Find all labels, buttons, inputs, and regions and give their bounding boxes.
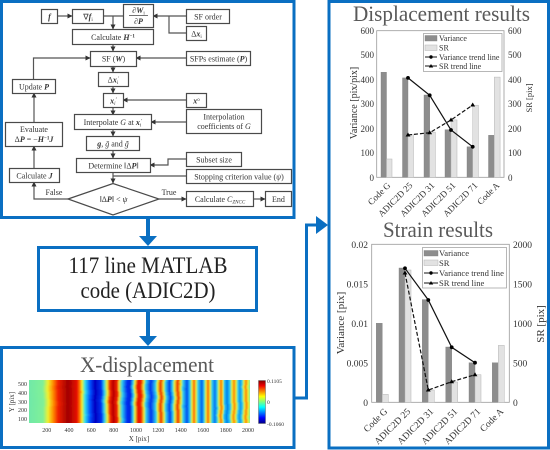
box: x zero: o bbox=[197, 98, 200, 103]
panel: results bbox=[329, 1, 548, 448]
category labels: Code G bbox=[366, 180, 393, 207]
left axis ticks: 0 bbox=[363, 399, 368, 409]
heatmap x ticks: 800 bbox=[109, 428, 118, 434]
right axis ticks: 100 bbox=[508, 148, 522, 158]
box: update P bbox=[12, 80, 56, 94]
box: stopping criterion: Stopping criterion value (ψ) bbox=[194, 172, 284, 182]
left axis ticks: 0 bbox=[370, 173, 374, 183]
right axis ticks bbox=[508, 26, 522, 183]
heatmap x ticks: 600 bbox=[87, 428, 96, 434]
box: gradient f: i bbox=[91, 18, 93, 23]
left axis ticks: 200 bbox=[360, 124, 374, 134]
colorbar bbox=[258, 379, 284, 428]
category labels: ADIC2D 51 bbox=[419, 180, 457, 219]
box: interpolate G bbox=[74, 114, 152, 130]
heading: X-displacement: X-displacement bbox=[80, 352, 214, 377]
heatmap x ticks: 1000 bbox=[130, 428, 142, 434]
box: calculate H inverse bbox=[72, 30, 154, 44]
category labels: ADIC2D 31 bbox=[396, 407, 436, 447]
box: determine norm bbox=[76, 158, 150, 172]
box: dW/dP: ∂W bbox=[132, 6, 143, 15]
flowchart connectors bbox=[34, 16, 265, 199]
left axis ticks bbox=[360, 26, 374, 183]
box: SF order bbox=[186, 10, 230, 24]
right axis ticks: 1000 bbox=[513, 320, 532, 330]
heatmap y ticks: 100 bbox=[18, 417, 27, 423]
box: f bbox=[42, 10, 58, 24]
box: evaluate delta P: −1 bbox=[44, 136, 50, 142]
left axis ticks: 400 bbox=[360, 75, 374, 85]
box: calculate H inverse: Calculate H bbox=[91, 33, 130, 42]
box: calculate J: Calculate J bbox=[16, 172, 54, 180]
box: subset size bbox=[186, 152, 242, 166]
box: determine norm: Determine ‖ΔP‖ bbox=[88, 162, 139, 170]
label: false: False bbox=[46, 188, 63, 197]
heatmap y ticks: 300 bbox=[18, 400, 27, 406]
box: evaluate delta P: J bbox=[48, 135, 54, 144]
box: calculate H inverse: −1 bbox=[130, 34, 135, 40]
trend lines bbox=[403, 266, 477, 392]
box: delta x prime: ′ bbox=[118, 77, 119, 82]
heading: strain results: Strain results bbox=[383, 217, 493, 242]
colorbar: 0 bbox=[267, 400, 270, 406]
heatmap x ticks: 1800 bbox=[220, 428, 232, 434]
category labels: ADIC2D 31 bbox=[398, 180, 436, 219]
box: x prime bbox=[104, 94, 124, 108]
category labels bbox=[362, 407, 506, 447]
heatmap bbox=[29, 380, 250, 423]
box: delta x prime: Δx bbox=[108, 76, 117, 84]
box: g derivatives: g, ḡ and g̃ bbox=[96, 140, 130, 148]
category labels: ADIC2D 25 bbox=[373, 407, 413, 447]
box: interpolate G: ′ bbox=[141, 120, 142, 124]
legend: Variance bbox=[439, 34, 467, 43]
box: SF (W) bbox=[90, 52, 136, 66]
box: delta x prime bbox=[98, 72, 128, 86]
chart: strain bbox=[335, 241, 547, 447]
box: g derivatives bbox=[86, 136, 140, 150]
right axis ticks: 0 bbox=[513, 399, 518, 409]
box: gradient f bbox=[72, 10, 104, 24]
bars bbox=[381, 72, 500, 177]
left axis ticks: 0.02 bbox=[351, 241, 368, 251]
right axis ticks: 2000 bbox=[513, 241, 532, 251]
box: calculate C ZNCC: ZNCC bbox=[232, 200, 246, 206]
heatmap x ticks: 1400 bbox=[175, 428, 187, 434]
box: dW/dP: ∂P bbox=[134, 17, 143, 26]
left axis ticks: 500 bbox=[360, 50, 374, 60]
left axis ticks: 0.015 bbox=[347, 280, 368, 290]
heatmap y ticks bbox=[18, 382, 27, 423]
left axis ticks: 300 bbox=[360, 99, 374, 109]
colorbar: 0.1105 bbox=[267, 379, 282, 385]
box: calculate C ZNCC bbox=[186, 192, 254, 206]
box: interpolate G: i bbox=[140, 124, 142, 128]
y axis label: Y [pix] bbox=[8, 392, 16, 412]
box: delta x prime: i bbox=[117, 81, 119, 86]
box: gradient f: ∇f bbox=[83, 12, 91, 22]
left axis ticks: 100 bbox=[360, 148, 374, 158]
left axis label: Variance [pix] bbox=[335, 292, 347, 354]
panel: flowchart bbox=[2, 2, 294, 218]
heatmap x ticks: 2000 bbox=[242, 428, 254, 434]
legend bbox=[424, 34, 502, 72]
box: interpolation coefficients: coefficients of G bbox=[197, 122, 251, 131]
box: evaluate delta P bbox=[6, 122, 62, 146]
category labels: Code A bbox=[475, 180, 502, 207]
heatmap y ticks: 400 bbox=[18, 391, 27, 397]
right axis ticks: 400 bbox=[508, 75, 522, 85]
legend: SR trend line bbox=[439, 278, 485, 288]
chart: displacement bbox=[349, 26, 534, 219]
heatmap x ticks: 200 bbox=[42, 428, 51, 434]
legend: Variance trend line bbox=[439, 268, 504, 278]
colorbar: -0.1060 bbox=[267, 422, 284, 428]
legend: Variance bbox=[439, 248, 469, 258]
left axis label: Variance [pix/pix] bbox=[349, 67, 360, 139]
category labels: ADIC2D 71 bbox=[443, 407, 483, 447]
box: end: End bbox=[272, 195, 285, 204]
right axis ticks: 600 bbox=[508, 26, 522, 36]
legend bbox=[422, 248, 506, 288]
box: SFPs estimate: SFPs estimate (P) bbox=[190, 54, 248, 64]
legend: SR bbox=[439, 258, 450, 268]
left axis ticks: 0.005 bbox=[347, 360, 368, 370]
box: x prime: ′ bbox=[115, 98, 117, 103]
box: x zero bbox=[186, 94, 206, 108]
box: f: f bbox=[48, 12, 52, 22]
box: interpolate G: Interpolate G at x bbox=[84, 118, 140, 127]
box: x zero: x bbox=[192, 96, 197, 106]
box: interpolation coefficients bbox=[186, 110, 262, 134]
right axis label: SR [pix] bbox=[535, 305, 547, 343]
arrow: flowchart to MATLAB code bbox=[139, 219, 157, 246]
heatmap x ticks bbox=[42, 428, 254, 434]
left axis ticks: 0.01 bbox=[351, 320, 368, 330]
box: SFPs estimate bbox=[186, 52, 250, 66]
category labels: ADIC2D 25 bbox=[376, 180, 415, 219]
box: delta x: Δx bbox=[191, 30, 200, 38]
label: true: True bbox=[162, 188, 177, 197]
decision diamond: ‖ΔP‖ < ψ bbox=[99, 195, 129, 204]
box: delta x bbox=[186, 26, 206, 40]
box: evaluate delta P: ΔP = −H bbox=[15, 135, 44, 144]
box: SF order: SF order bbox=[194, 12, 222, 22]
arrow: MATLAB code to X-displacement bbox=[139, 312, 157, 346]
right axis ticks: 0 bbox=[508, 173, 513, 183]
right axis ticks bbox=[513, 241, 532, 409]
box: subset size: Subset size bbox=[196, 156, 232, 164]
box: interpolation coefficients: Interpolation bbox=[203, 112, 245, 122]
heatmap x ticks: 400 bbox=[64, 428, 74, 434]
legend: Variance trend line bbox=[439, 53, 500, 62]
right axis ticks: 500 bbox=[508, 50, 522, 60]
bars bbox=[376, 268, 504, 402]
right axis ticks: 1500 bbox=[513, 280, 532, 290]
box: calculate J bbox=[10, 168, 60, 182]
box: x prime: x bbox=[110, 96, 114, 106]
right axis label: SR [pix] bbox=[524, 83, 534, 113]
right axis ticks: 200 bbox=[508, 124, 522, 134]
box: dW/dP: i bbox=[143, 12, 145, 16]
box: evaluate delta P: Evaluate bbox=[20, 125, 48, 134]
box: SF (W): SF (W) bbox=[102, 54, 126, 64]
box: dW/dP bbox=[124, 4, 154, 28]
right axis ticks: 500 bbox=[513, 360, 528, 370]
box: end bbox=[266, 192, 292, 206]
trend lines bbox=[406, 76, 475, 149]
box: stopping criterion bbox=[186, 170, 292, 184]
category labels: ADIC2D 71 bbox=[441, 180, 479, 219]
panel: X-displacement bbox=[2, 348, 294, 448]
heatmap x ticks: 1200 bbox=[152, 428, 164, 434]
x axis label: X [pix] bbox=[129, 435, 149, 443]
category labels: Code G bbox=[362, 407, 390, 435]
legend: SR bbox=[439, 44, 449, 52]
heatmap y ticks: 500 bbox=[18, 382, 27, 388]
box: x prime: i bbox=[114, 102, 116, 107]
heatmap x ticks: 1600 bbox=[197, 428, 209, 434]
legend: SR trend line bbox=[439, 62, 482, 71]
right axis ticks: 300 bbox=[508, 99, 522, 109]
left axis ticks: 600 bbox=[360, 26, 374, 36]
panel: MATLAB code: 117 line MATLAB bbox=[68, 253, 228, 278]
box: update P: Update P bbox=[19, 82, 49, 92]
panel: MATLAB code: code (ADIC2D) bbox=[80, 278, 216, 303]
category labels bbox=[366, 180, 502, 219]
decision diamond bbox=[68, 184, 159, 215]
box: calculate C ZNCC: Calculate C bbox=[195, 195, 232, 204]
heading: displacement results: Displacement results bbox=[353, 1, 530, 26]
panel: MATLAB code bbox=[38, 248, 256, 310]
heatmap y ticks: 200 bbox=[18, 408, 27, 414]
category labels: ADIC2D 51 bbox=[420, 407, 460, 447]
arrow: X-displacement to results bbox=[294, 216, 328, 398]
category labels: Code A bbox=[479, 407, 506, 434]
left axis ticks bbox=[347, 241, 368, 409]
box: delta x: i bbox=[200, 35, 202, 40]
